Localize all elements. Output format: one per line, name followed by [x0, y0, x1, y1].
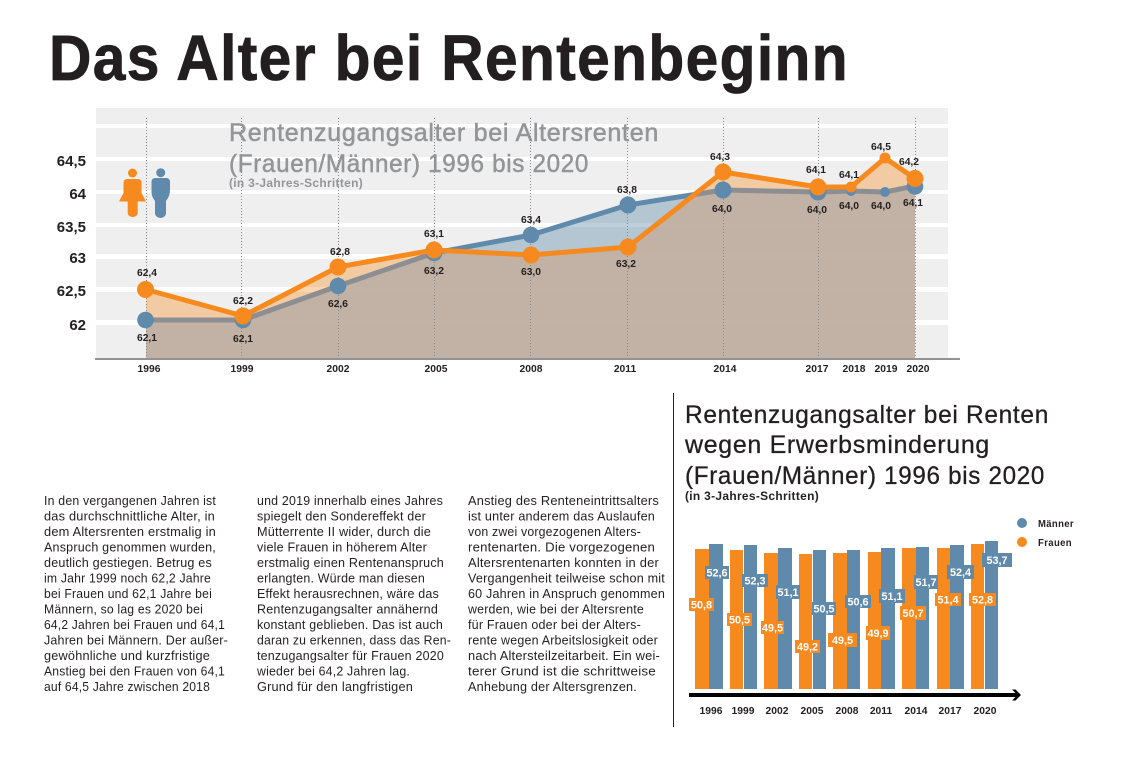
chart heading — [229, 119, 659, 190]
text column 1: dem Altersrenten erstmalig in — [44, 524, 216, 539]
area: men — [146, 186, 915, 358]
text column 1: Anstieg bei den Frauen von 64,1 — [44, 664, 225, 678]
year labels: 2002 — [766, 706, 789, 717]
text column 2: Effekt herausrechnen, wäre das — [257, 586, 439, 601]
year labels: 2014 — [905, 706, 928, 717]
points: women — [137, 152, 924, 324]
text column 1: auf 64,5 Jahre zwischen 2018 — [44, 679, 210, 694]
value tags: women: 49,5 — [762, 622, 783, 634]
dotted year guides — [146, 118, 916, 358]
line chart: retirement age for old-age pensions — [57, 108, 960, 375]
value tags: women: 50,7 — [902, 608, 924, 620]
text column 1: Anspruch genommen wurden, — [44, 540, 216, 554]
x axis year labels: 2018 — [843, 364, 866, 375]
bar chart: retirement age for reduced earning capacity — [689, 518, 1074, 717]
value tags: women: 49,2 — [797, 642, 818, 654]
value labels: men: 63,2 — [424, 266, 444, 277]
text column 3: Anhebung der Altersgrenzen. — [468, 679, 637, 694]
x axis year labels: 1996 — [138, 364, 161, 375]
y axis labels — [57, 153, 87, 334]
value tags: men: 53,7 — [986, 555, 1008, 567]
chart heading: (Frauen/Männer) 1996 bis 2020 — [229, 150, 589, 178]
text column 2: erstmalig einen Rentenanspruch — [257, 555, 444, 570]
x axis year labels: 1999 — [231, 364, 254, 375]
year labels: 1996 — [700, 706, 723, 717]
x axis year labels: 2011 — [614, 364, 636, 375]
text column 3: rentenarten. Die vorgezogenen — [468, 540, 655, 554]
text column 1: bei Frauen und 62,1 Jahre bei — [44, 586, 212, 601]
value labels: women: 62,2 — [233, 296, 253, 307]
text column 3: Vergangenheit teilweise schon mit — [468, 570, 665, 586]
value labels: men: 62,1 — [233, 334, 253, 345]
value labels: women: 64,2 — [899, 157, 919, 168]
year labels: 2008 — [836, 706, 859, 717]
value labels: women: 62,8 — [330, 247, 350, 258]
year labels: 2005 — [801, 706, 824, 717]
text column 3: von zwei vorgezogenen Alters- — [468, 524, 641, 539]
arrow axis — [689, 690, 1021, 700]
text column 2: wieder bei 64,2 Jahren lag. — [256, 664, 410, 678]
chart heading: Rentenzugangsalter bei Altersrenten — [229, 119, 659, 147]
text column 1: In den vergangenen Jahren ist — [44, 493, 216, 508]
value labels: men: 62,1 — [137, 333, 157, 344]
x axis year labels: 2017 — [806, 364, 829, 375]
x axis year labels: 2014 — [714, 364, 737, 375]
icon: man — [151, 168, 170, 218]
value tags: men: 51,1 — [777, 587, 799, 599]
value tags: men: 50,6 — [847, 596, 869, 608]
text column 3: 60 Jahren in Anspruch genommen — [468, 586, 665, 601]
value labels: women — [137, 142, 919, 307]
x axis year labels: 2002 — [327, 364, 350, 375]
value labels: women: 63,1 — [424, 229, 444, 240]
value tags: men: 52,3 — [744, 576, 766, 588]
text column 3: nach Altersteilzeitarbeit. Ein wei- — [468, 648, 660, 663]
value tags: women: 51,4 — [937, 594, 959, 606]
text column 1: das durchschnittliche Alter, in — [44, 508, 215, 524]
text column 3: ist unter anderem das Auslaufen — [468, 508, 655, 524]
text column 3: rente wegen Arbeitslosigkeit oder — [468, 632, 659, 648]
bar chart heading: (in 3-Jahres-Schritten) — [685, 491, 819, 503]
value labels: men: 63,8 — [617, 185, 637, 196]
text column 1: Jahren bei Männern. Der außer- — [44, 632, 228, 648]
value tags: men: 52,6 — [706, 568, 728, 580]
text column 1: deutlich gestiegen. Betrug es — [44, 555, 212, 570]
value tags: men: 51,7 — [915, 577, 937, 589]
line: men — [146, 186, 915, 320]
value labels: men — [137, 185, 923, 345]
value labels: women: 63,0 — [521, 267, 541, 278]
title: Das Alter bei Rentenbeginn — [49, 22, 849, 94]
value labels: men: 64,1 — [903, 198, 923, 209]
text column 2: konstant geblieben. Das ist auch — [257, 617, 443, 632]
text column 2: und 2019 innerhalb eines Jahres — [257, 493, 443, 508]
year labels: 2020 — [974, 706, 997, 717]
value labels: women: 63,2 — [616, 259, 636, 270]
y axis labels: 62,5 — [57, 283, 86, 300]
y axis labels: 64,5 — [57, 153, 86, 170]
text column 2 — [256, 493, 451, 694]
bars: women — [695, 544, 984, 689]
text column 1: Männern, so lag es 2020 bei — [44, 602, 203, 616]
x axis year labels — [138, 364, 930, 375]
legend — [1017, 518, 1074, 549]
text column 2: Grund für den langfristigen — [257, 679, 413, 694]
bars: men — [709, 541, 998, 689]
bar chart heading — [684, 401, 1049, 503]
x axis year labels: 2019 — [875, 364, 898, 375]
text column 1: 64,2 Jahren bei Frauen und 64,1 — [44, 617, 225, 632]
text column 1 — [44, 493, 228, 694]
value tags: women: 49,9 — [867, 628, 889, 640]
value tags: women: 52,8 — [972, 594, 993, 606]
panel divider line — [673, 393, 674, 727]
value labels: women: 64,1 — [806, 165, 826, 176]
icon: woman — [119, 168, 146, 217]
y axis labels: 63,5 — [57, 219, 86, 236]
text column 3 — [467, 493, 665, 694]
points: men — [137, 178, 923, 328]
value tags: men: 50,5 — [813, 604, 835, 616]
y axis labels: 64 — [69, 186, 87, 203]
text column 2: tenzugangsalter für Frauen 2020 — [257, 648, 444, 663]
bar chart heading: (Frauen/Männer) 1996 bis 2020 — [685, 462, 1045, 490]
year labels: 2017 — [939, 706, 962, 717]
year labels: 2011 — [870, 706, 892, 717]
value labels: men: 64,0 — [871, 201, 891, 212]
text column 3: für Frauen oder bei der Alters- — [468, 617, 641, 632]
line: women — [146, 158, 915, 316]
value tags: women — [689, 593, 996, 654]
value labels: women: 64,3 — [710, 152, 730, 163]
value labels: men: 63,4 — [521, 215, 541, 226]
text column 3: terer Grund ist die schrittweise — [468, 664, 656, 678]
y axis labels: 62 — [69, 317, 86, 334]
y axis labels: 63 — [69, 250, 86, 267]
text column 2: Rentenzugangsalter annähernd — [257, 602, 438, 616]
x axis year labels: 2005 — [425, 364, 448, 375]
value tags: women: 49,5 — [832, 635, 853, 647]
value tags: women: 50,8 — [691, 600, 712, 612]
text column 1: im Jahr 1999 noch 62,2 Jahre — [44, 570, 211, 586]
value labels: women: 62,4 — [137, 268, 157, 279]
legend: Frauen — [1038, 538, 1072, 549]
value labels: men: 64,0 — [712, 204, 732, 215]
x axis year labels: 2020 — [907, 364, 930, 375]
value tags: women: 50,5 — [729, 614, 750, 626]
value labels: women: 64,5 — [871, 142, 891, 153]
chart background bands — [96, 108, 948, 358]
area: women — [146, 158, 915, 358]
x axis line — [95, 358, 960, 360]
text column 2: Mütterrente II wider, durch die — [257, 524, 431, 539]
value labels: men: 62,6 — [328, 299, 348, 310]
area: overlap of men and women — [146, 186, 915, 358]
text column 1: gewöhnliche und kurzfristige — [44, 648, 210, 663]
bar chart heading: Rentenzugangsalter bei Renten — [685, 401, 1049, 429]
value labels: men: 64,0 — [839, 201, 859, 212]
text column 2: viele Frauen in höherem Alter — [257, 540, 428, 554]
chart heading: (in 3-Jahres-Schritten) — [229, 178, 363, 190]
value tags: men — [705, 553, 1012, 616]
legend: Männer — [1038, 519, 1074, 530]
text column 3: Anstieg des Renteneintrittsalters — [468, 493, 659, 508]
year labels: 1999 — [732, 706, 755, 717]
text column 2: daran zu erkennen, dass das Ren- — [257, 632, 451, 648]
value tags: men: 52,4 — [950, 567, 971, 579]
value labels: men: 64,0 — [807, 205, 827, 216]
text column 2: erlangten. Würde man diesen — [257, 570, 425, 586]
value labels: women: 64,1 — [839, 170, 859, 181]
x axis year labels: 2008 — [520, 364, 543, 375]
bar chart heading: wegen Erwerbsminderung — [684, 431, 990, 459]
year labels — [700, 706, 997, 717]
value tags: men: 51,1 — [881, 591, 903, 603]
text column 3: werden, wie bei der Altersrente — [467, 602, 644, 616]
text column 3: Altersrentenarten konnten in der — [468, 555, 660, 570]
text column 2: spiegelt den Sondereffekt der — [257, 508, 427, 524]
